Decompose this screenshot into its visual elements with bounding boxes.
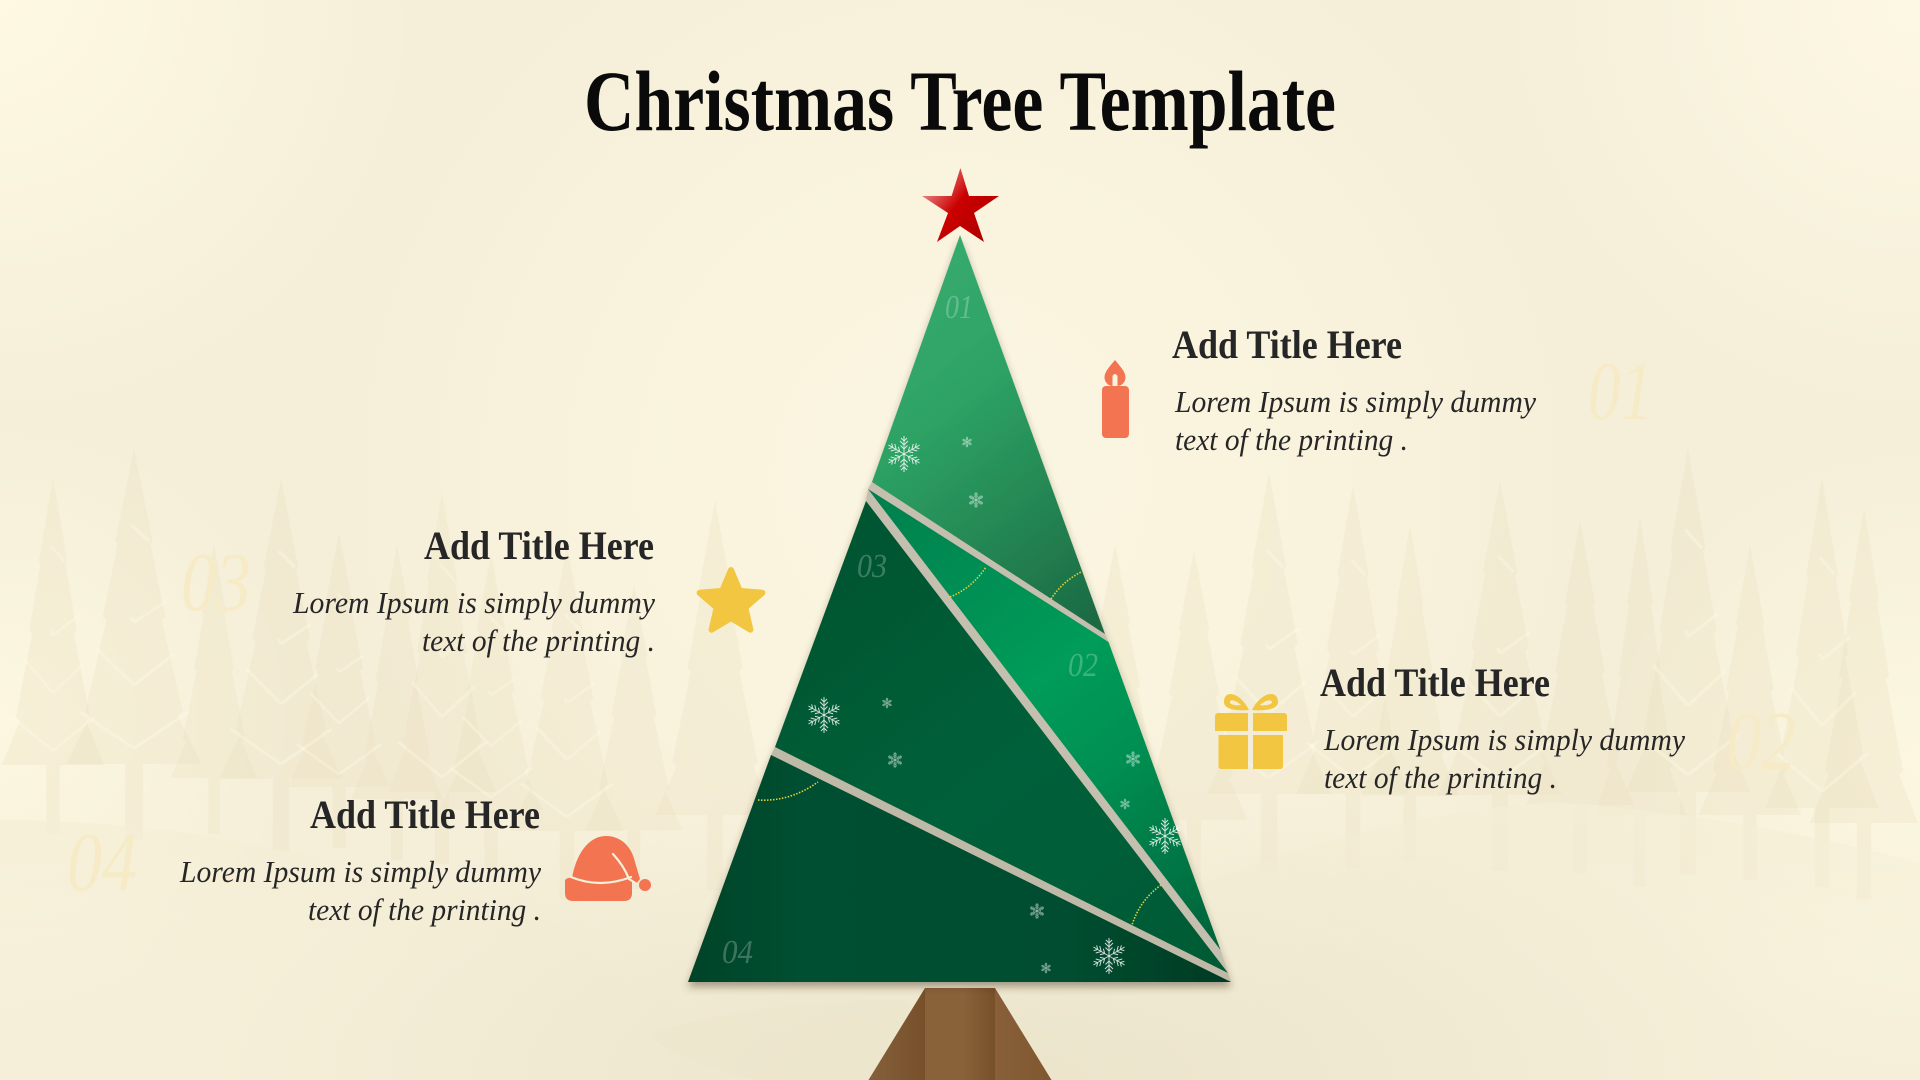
icon: candle [1102,360,1129,438]
icon: gift box [1215,694,1287,769]
background number 04: 04 [67,816,137,909]
body 01: text of the printing . [1175,422,1408,457]
body 03: text of the printing . [422,623,655,658]
number 02 on tree: 02 [1068,647,1098,684]
panel: segment 04 [688,755,1231,982]
heading 03: Add Title Here [424,523,654,568]
body 02: text of the printing . [1324,760,1557,795]
icon: yellow star [700,570,762,630]
text block 03 [181,523,655,658]
icon: santa hat [565,836,651,901]
heading 01: Add Title Here [1172,322,1402,367]
body 04: Lorem Ipsum is simply dummy [179,854,541,889]
background number 03: 03 [181,536,251,629]
tree trunk [868,988,1052,1080]
body 04 [179,854,541,927]
heading 04: Add Title Here [310,792,540,837]
title: Christmas Tree Template [584,53,1336,149]
icon: red star tree topper [922,168,999,242]
forest silhouettes [2,447,1918,899]
body 02: Lorem Ipsum is simply dummy [1323,722,1685,757]
body 01: Lorem Ipsum is simply dummy [1174,384,1536,419]
background number 02: 02 [1726,695,1796,788]
panel: segment 01 [872,235,1105,634]
number 04 on tree: 04 [722,934,753,971]
panel: segment 02 [868,489,1220,950]
body 03 [292,585,655,658]
snowflakes [806,436,1183,974]
text block 02 [1320,660,1796,795]
dotted garland arcs [758,567,1161,925]
panel: segment 03 [775,501,1228,973]
background number 01: 01 [1588,345,1653,438]
number 03 on tree: 03 [857,548,887,585]
body 01 [1174,384,1536,457]
number 01 on tree: 01 [945,289,973,326]
body 02 [1323,722,1685,795]
christmas tree [688,235,1231,982]
snow hills [0,820,720,990]
text block 01 [1172,322,1653,457]
text block 04 [67,792,541,927]
heading 02: Add Title Here [1320,660,1550,705]
body 03: Lorem Ipsum is simply dummy [292,585,655,620]
body 04: text of the printing . [308,892,541,927]
